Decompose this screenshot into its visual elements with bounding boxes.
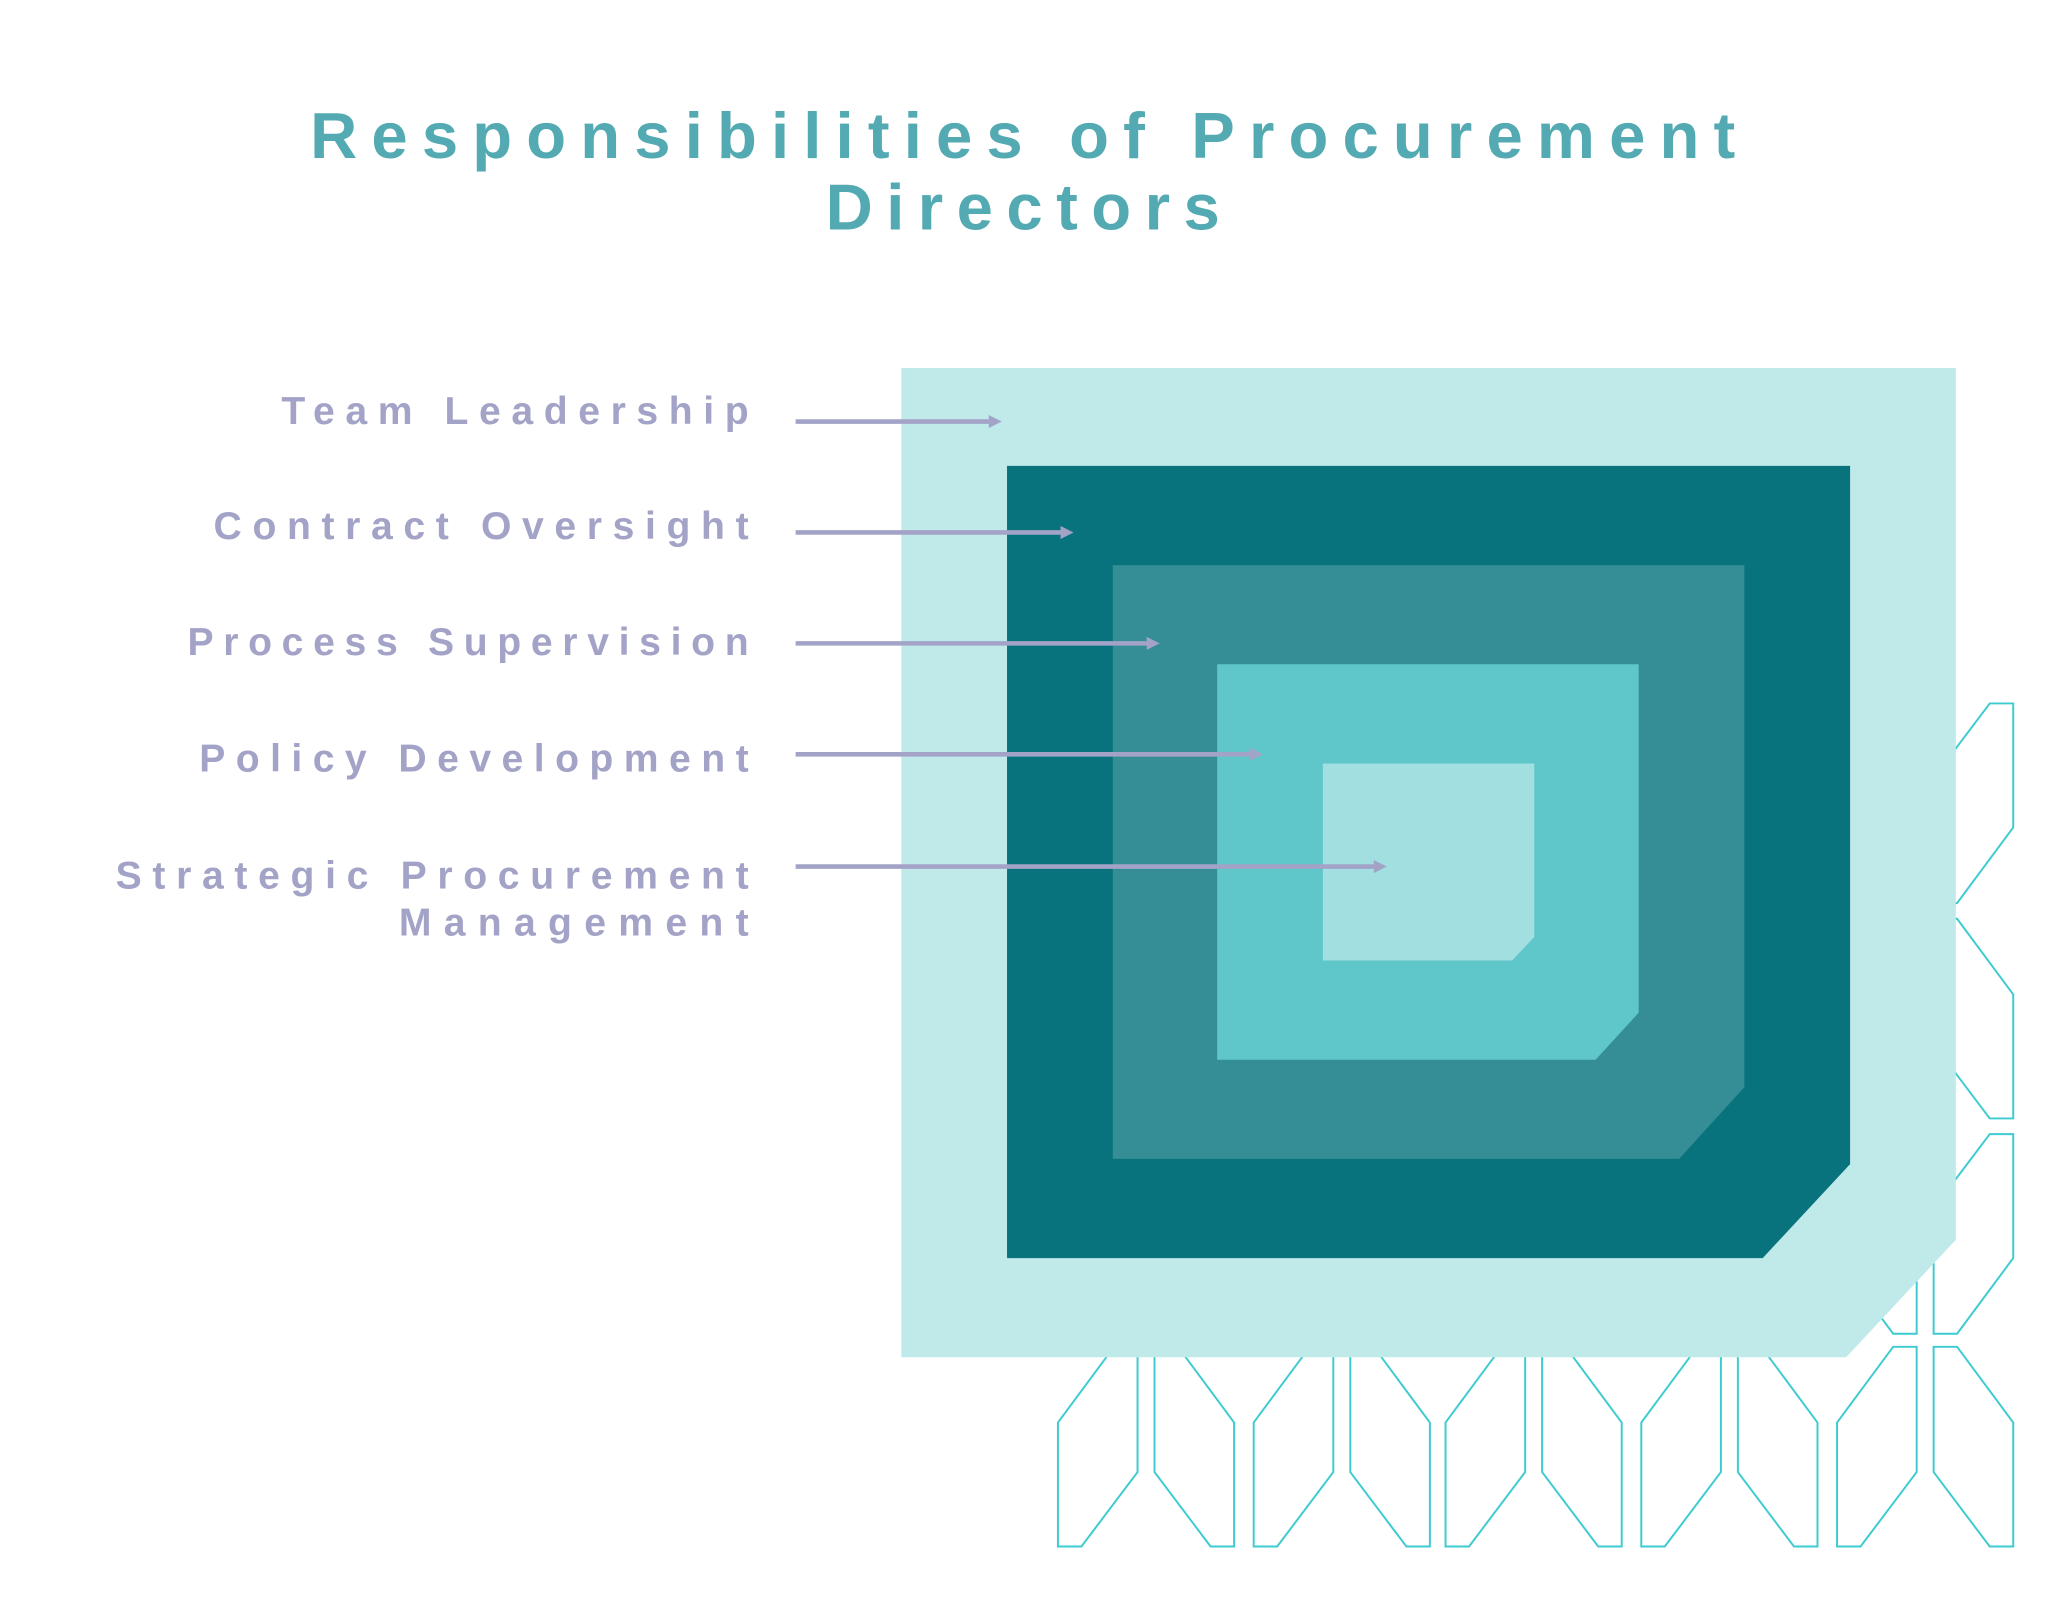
labels: Management	[399, 902, 749, 945]
title: Directors	[826, 171, 1220, 244]
arrows	[796, 415, 1387, 873]
labels: Policy Development	[199, 737, 749, 780]
labels: Team Leadership	[281, 390, 749, 433]
layer 5: strategic procurement management	[1323, 763, 1534, 961]
title: Responsibilities of Procurement	[310, 99, 1735, 172]
layer 2: contract oversight	[1007, 466, 1850, 1258]
labels	[116, 390, 749, 945]
labels: Process Supervision	[187, 621, 749, 664]
title	[310, 99, 1735, 244]
layer 3: process supervision	[1113, 565, 1744, 1159]
labels: Strategic Procurement	[116, 855, 749, 898]
layered square diagram	[901, 368, 1956, 1357]
layer 1: team leadership	[901, 368, 1956, 1357]
layer 4: policy development	[1217, 664, 1639, 1060]
labels: Contract Oversight	[214, 505, 749, 548]
background pattern	[1058, 703, 2013, 1546]
